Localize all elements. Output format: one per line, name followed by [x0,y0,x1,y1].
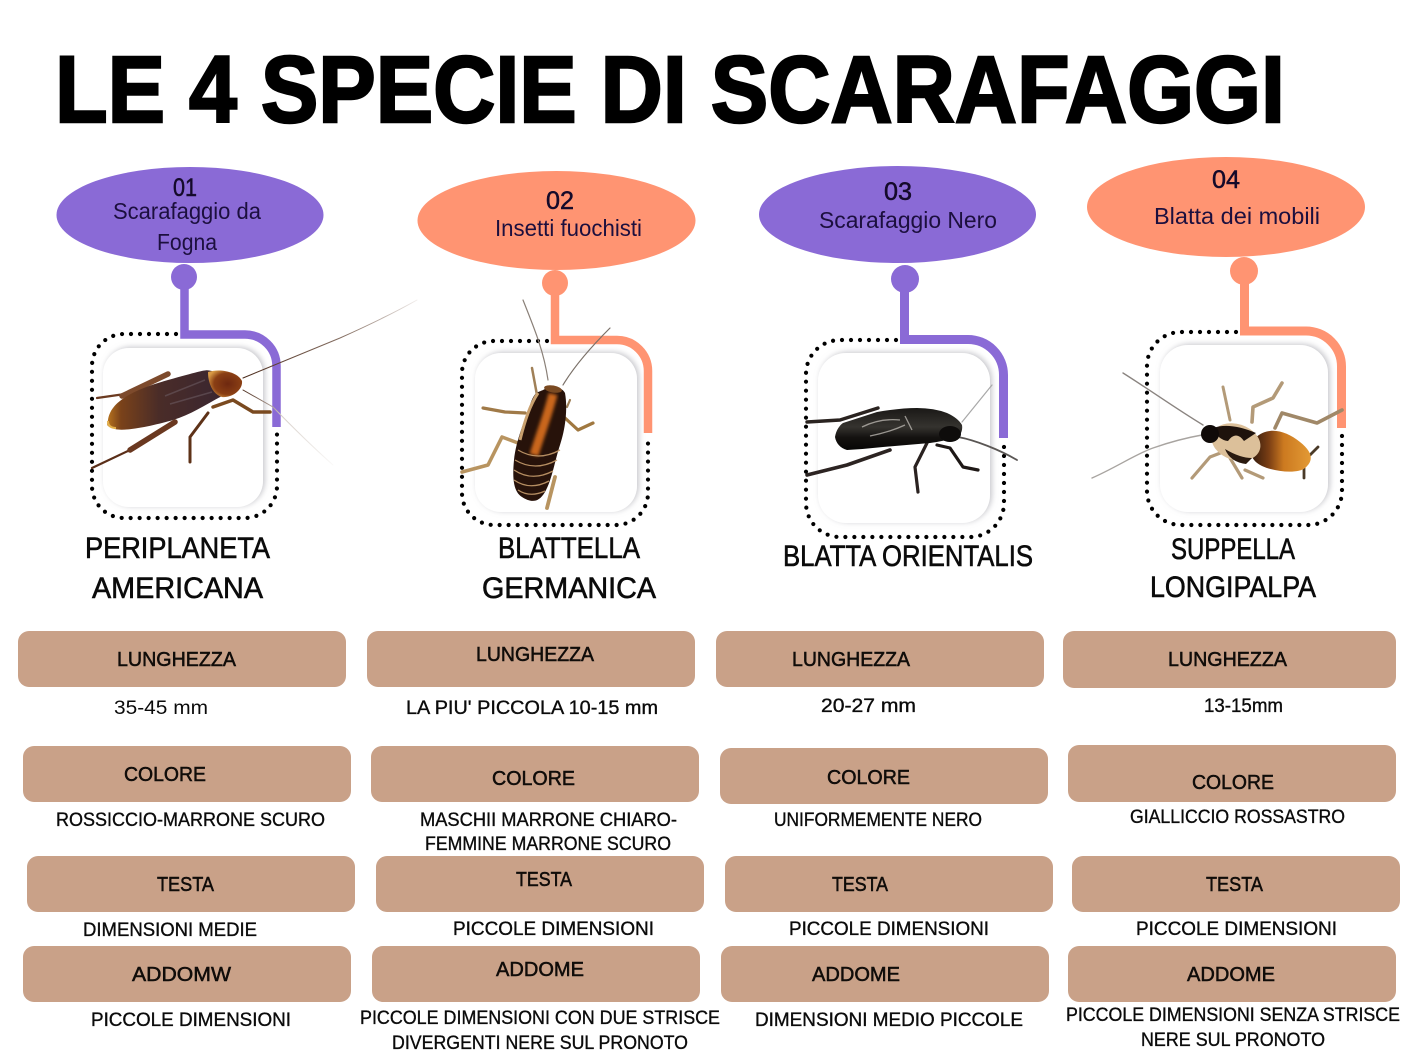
label box: lunghezza 02 [367,631,695,687]
label box: testa 03 [725,856,1053,912]
label box: colore 04 [1068,745,1396,802]
value: colore 02 [420,810,677,855]
connector 04 [1230,257,1342,428]
image card 03 [818,353,990,523]
image card 01 [103,348,263,507]
label box: colore 02 [371,746,699,802]
label box: testa 03: TESTA [832,874,889,896]
value: addome 01: PICCOLE DIMENSIONI [91,1010,291,1031]
label box: testa 02: TESTA [516,869,573,891]
icon: cockroach 02 [462,300,610,508]
badge 03: Scarafaggio Nero [819,207,997,233]
label box: colore 03: COLORE [827,767,910,789]
species name 01 [85,532,270,605]
label box: testa 01: TESTA [157,874,215,896]
value: addome 04 [1066,1005,1400,1051]
value: colore 02: FEMMINE MARRONE SCURO [425,834,671,855]
species name 01: AMERICANA [92,572,263,605]
label box: addome 01 [23,946,351,1002]
label box: testa 04 [1072,856,1400,912]
label box: addome 03: ADDOME [812,964,900,986]
badge 04 [1087,157,1365,257]
label box: addome 03 [721,946,1049,1002]
label box: lunghezza 04: LUNGHEZZA [1168,649,1288,671]
connector 03 [891,265,1004,438]
species name 02: BLATTELLA [498,532,640,565]
value: colore 02: MASCHII MARRONE CHIARO- [420,810,677,831]
value: lunghezza 03: 20-27 mm [821,696,916,717]
badge 02 [418,171,696,270]
dotted frame 01 [92,334,277,518]
value: addome 02: DIVERGENTI NERE SUL PRONOTO [392,1033,688,1054]
label box: lunghezza 02: LUNGHEZZA [476,644,595,666]
dotted frame 04 [1147,332,1342,525]
value: lunghezza 04: 13-15mm [1204,696,1283,717]
icon: cockroach 04 [1092,373,1342,478]
label box: lunghezza 01: LUNGHEZZA [117,649,237,671]
label box: lunghezza 03: LUNGHEZZA [792,649,911,671]
icon: cockroach 01 [92,300,417,468]
badge 01: Scarafaggio da [113,198,261,224]
value: colore 01: ROSSICCIO-MARRONE SCURO [56,810,325,831]
label box: lunghezza 01 [18,631,346,687]
badge 01: 01 [173,174,197,202]
value: lunghezza 01: 35-45 mm [114,698,208,719]
connector 01 [171,264,276,427]
icon: cockroach 03 [807,385,1017,492]
label box: testa 02 [376,856,704,912]
label box: colore 01 [23,746,351,802]
badge 04: Blatta dei mobili [1154,203,1320,229]
value: colore 04: GIALLICCIO ROSSASTRO [1130,807,1345,828]
panel: species 02 [418,171,696,525]
species name 01: PERIPLANETA [85,532,270,565]
badge 01: Fogna [157,229,217,255]
species name 02 [482,532,656,605]
row: addome [23,946,1400,1054]
badge 01 [56,167,324,263]
species name 04: LONGIPALPA [1150,571,1316,604]
dotted frame 03 [806,340,1004,537]
badge 03 [759,166,1036,263]
label box: colore 03 [720,748,1048,804]
species name 04 [1150,533,1316,604]
species name 02: GERMANICA [482,572,656,605]
label box: addome 04: ADDOME [1187,964,1275,986]
panel: species 04 [1087,157,1365,525]
label box: addome 02: ADDOME [496,959,584,981]
label box: testa 01 [27,856,355,912]
image card 02 [475,353,637,512]
row: lunghezza [18,631,1396,719]
row: colore [23,745,1396,855]
badge 02: Insetti fuochisti [495,215,642,241]
value: lunghezza 02: LA PIU' PICCOLA 10-15 mm [406,698,658,719]
label box: testa 04: TESTA [1206,874,1264,896]
image card 04 [1160,345,1328,512]
label box: colore 02: COLORE [492,768,575,790]
label box: addome 01: ADDOMW [132,964,231,986]
badge 03: 03 [884,178,912,206]
panel: species 03 [759,166,1036,537]
value: testa 03: PICCOLE DIMENSIONI [789,919,989,940]
badge 02: 02 [546,187,574,215]
label box: lunghezza 03 [716,631,1044,687]
label box: colore 04: COLORE [1192,772,1274,794]
value: addome 02: PICCOLE DIMENSIONI CON DUE STRISCE [360,1008,720,1029]
value: addome 02 [360,1008,720,1054]
value: addome 04: NERE SUL PRONOTO [1141,1030,1325,1051]
connector 02 [542,270,648,433]
label box: addome 04 [1068,946,1396,1002]
value: colore 03: UNIFORMEMENTE NERO [774,810,982,831]
value: addome 03: DIMENSIONI MEDIO PICCOLE [755,1010,1023,1031]
value: testa 01: DIMENSIONI MEDIE [83,920,257,941]
label box: colore 01: COLORE [124,764,206,786]
badge 04: 04 [1212,166,1240,194]
label box: addome 02 [372,946,700,1002]
row: testa [27,856,1400,941]
value: testa 02: PICCOLE DIMENSIONI [453,919,654,940]
dotted frame 02 [462,341,648,525]
value: testa 04: PICCOLE DIMENSIONI [1136,919,1337,940]
species name 03: BLATTA ORIENTALIS [783,540,1033,573]
species name 04: SUPPELLA [1171,533,1295,566]
panel: species 01 [56,167,417,518]
title: LE 4 SPECIE DI SCARAFAGGI [55,37,1285,143]
label box: lunghezza 04 [1063,631,1396,688]
